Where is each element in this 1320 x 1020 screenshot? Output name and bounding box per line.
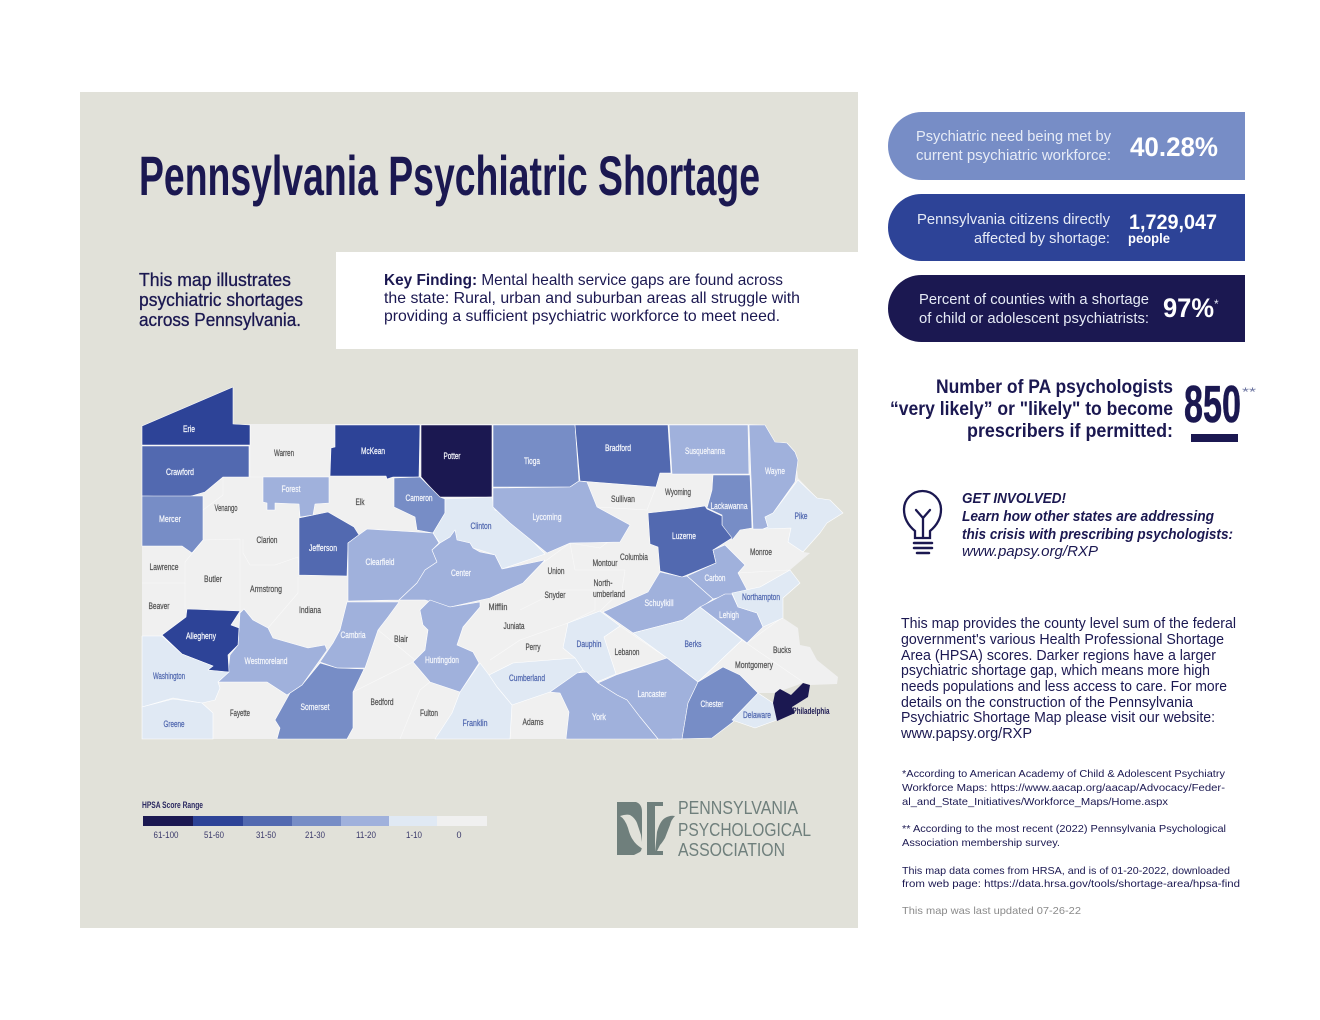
county: Cumberland	[489, 658, 583, 705]
map: county labels: Tioga	[524, 456, 540, 466]
footnotes: *According to American Academy of Child & Adolescent Psychiatry	[902, 768, 1226, 780]
map: county labels: Carbon	[704, 573, 726, 583]
text block: map description: Area (HPSA) scores. Darker regions have a larger	[901, 648, 1216, 664]
county base: zero score counties	[142, 424, 843, 739]
stat pill: citizens affected	[888, 194, 1245, 261]
callout: 850 psychologists: “very likely” or "likely" to become	[890, 399, 1173, 420]
stat pill: psychiatric need met: 40.28%	[1130, 132, 1218, 162]
county: Crawford	[142, 446, 249, 497]
county: Clearfield	[348, 529, 439, 601]
map: county labels: Wyoming	[665, 487, 691, 497]
map: county labels: Wayne	[765, 466, 785, 476]
county: Delaware	[732, 693, 777, 728]
text block: get involved: GET INVOLVED!	[962, 491, 1066, 507]
map: county labels: Greene	[164, 719, 184, 729]
map: county labels: Venango	[214, 503, 238, 513]
county: Center	[399, 530, 545, 607]
map: county labels: Erie	[183, 424, 195, 434]
title: Pennsylvania Psychiatric Shortage	[139, 144, 760, 207]
map: county labels: Butler	[204, 574, 222, 584]
map: county labels: Clearfield	[366, 557, 394, 567]
map: county labels: Snyder	[544, 590, 566, 600]
county: Potter	[421, 425, 492, 497]
footnotes: ** According to the most recent (2022) Pennsylvania Psychological	[902, 823, 1226, 835]
county: Lycoming	[493, 481, 630, 553]
county: Lancaster	[598, 658, 698, 739]
map: county labels: Pike	[794, 511, 808, 521]
text block: get involved: this crisis with prescribing psychologists:	[962, 527, 1233, 543]
county: Bradford	[575, 425, 671, 487]
county: Northampton	[732, 570, 800, 627]
map: county labels: Northampton	[742, 592, 780, 602]
stat pill: counties with shortage: of child or adolescent psychiatrists:	[919, 311, 1149, 327]
county: Susquehanna	[669, 425, 749, 474]
map: county labels: Adams	[522, 717, 544, 727]
map: county labels: Westmoreland	[244, 656, 288, 666]
map: county labels: Lancaster	[638, 689, 666, 699]
map: county labels: Bedford	[370, 697, 394, 707]
footnotes: This map data comes from HRSA, and is of 01-20-2022, downloaded	[902, 865, 1230, 877]
county: Berks	[633, 607, 742, 682]
county: Jefferson	[299, 512, 359, 576]
legend: HPSA score range: 0	[456, 830, 462, 840]
county: Philadelphia	[773, 683, 810, 721]
legend: HPSA score range: 31-50	[256, 830, 276, 840]
map: county labels: Lawrence	[150, 562, 178, 572]
map: county labels: Indiana	[299, 605, 321, 615]
text block: map description: www.papsy.org/RXP	[900, 726, 1032, 742]
text block: get involved: www.papsy.org/RXP	[962, 544, 1098, 560]
county: Luzerne	[648, 506, 732, 577]
footnotes: from web page: https://data.hrsa.gov/tools/shortage-area/hpsa-find	[902, 878, 1240, 890]
county: Forest	[263, 477, 329, 517]
stat pill: counties with shortage	[888, 275, 1245, 342]
map: county labels: Union	[548, 566, 564, 576]
map: county labels: Lebanon	[614, 647, 640, 657]
map: county labels: Delaware	[743, 710, 771, 720]
map: county labels: Bradford	[605, 443, 631, 453]
county: Westmoreland	[218, 609, 327, 695]
map: county labels: Franklin	[462, 718, 488, 728]
county: Dauphin	[563, 611, 620, 682]
stat pill: counties with shortage: *	[1214, 297, 1219, 311]
county: Huntingdon	[413, 600, 480, 692]
logo: Pennsylvania Psychological Association	[617, 798, 811, 860]
map: county labels: Fayette	[230, 708, 250, 718]
callout: 850 psychologists: 850	[1184, 376, 1241, 434]
map: county labels: Beaver	[148, 601, 170, 611]
map: county labels: Susquehanna	[685, 446, 725, 456]
county: Erie	[142, 387, 250, 445]
map: county labels	[148, 424, 830, 729]
panel: map background	[80, 92, 858, 928]
panel: key finding: Key Finding: Mental health service gaps are found across	[384, 272, 783, 289]
panel: key finding: the state: Rural, urban and suburban areas all struggle with	[384, 290, 800, 307]
map: county labels: Somerset	[300, 702, 330, 712]
stat pill: psychiatric need met: current psychiatric workforce:	[916, 148, 1111, 164]
text block: map description: This map provides the county level sum of the federal	[901, 616, 1236, 632]
icon: light bulb	[904, 491, 941, 553]
legend: HPSA score range: 21-30	[305, 830, 325, 840]
map: county labels: York	[592, 712, 606, 722]
map: county labels: Montgomery	[735, 660, 773, 670]
county: Cambria	[320, 602, 399, 668]
map: county labels: Washington	[153, 671, 185, 681]
map: county labels: Lackawanna	[710, 501, 748, 511]
callout: 850 psychologists	[890, 376, 1256, 442]
map: county labels: Crawford	[166, 467, 194, 477]
county: York	[550, 672, 658, 739]
map: county labels: Lycoming	[532, 512, 562, 522]
text block: map description	[900, 616, 1236, 742]
map: county labels: Philadelphia	[792, 706, 830, 716]
map: county labels: Berks	[684, 639, 702, 649]
stat pill: counties with shortage: Percent of counties with a shortage	[919, 292, 1149, 308]
county: Pike	[763, 480, 843, 552]
stat pill: citizens affected: people	[1128, 230, 1170, 246]
map: county labels: Clinton	[470, 521, 492, 531]
map: Pennsylvania counties	[142, 387, 843, 739]
text block: map description: details on the construction of the Pennsylvania	[901, 695, 1193, 711]
map: county labels: Mifflin	[488, 602, 508, 612]
map: county labels: Juniata	[504, 621, 524, 631]
callout: 850 psychologists: prescribers if permitted:	[967, 421, 1173, 442]
stat pill: counties with shortage: 97%	[1163, 293, 1214, 323]
map: county labels: Montour	[592, 558, 618, 568]
map: county labels: Monroe	[750, 547, 772, 557]
stat pill: psychiatric need met: Psychiatric need being met by	[916, 129, 1112, 145]
county: Franklin	[435, 663, 512, 739]
text block: get involved: Learn how other states are addressing	[962, 509, 1214, 525]
text block: map description: Psychiatric Shortage Map please visit our website:	[901, 710, 1215, 726]
footnotes	[902, 768, 1240, 917]
stat pill: psychiatric need met	[888, 112, 1245, 180]
map: county labels: Potter	[444, 451, 460, 461]
map: county labels: Armstrong	[250, 584, 282, 594]
footnotes: Association membership survey.	[902, 837, 1060, 849]
map: county labels: umberland	[593, 589, 625, 599]
map: county labels: Schuylkill	[644, 598, 674, 608]
county: Cameron	[394, 477, 445, 533]
map: county labels: Center	[451, 568, 471, 578]
callout: 850 psychologists: Number of PA psychologists	[936, 377, 1173, 398]
text block: map description: government's various Health Professional Shortage	[901, 632, 1224, 648]
county: Allegheny	[162, 609, 240, 673]
map: county labels: Luzerne	[672, 531, 696, 541]
text block: map intro: across Pennsylvania.	[139, 310, 301, 330]
map: county labels: Sullivan	[611, 494, 635, 504]
footnotes: Workforce Maps: https://www.aacap.org/aacap/Advocacy/Feder-	[902, 782, 1226, 794]
panel: key finding	[336, 252, 858, 349]
map: county labels: Cumberland	[509, 673, 545, 683]
map: county labels: Allegheny	[186, 631, 216, 641]
map: county labels: Cameron	[406, 493, 432, 503]
legend: HPSA score range: HPSA Score Range	[142, 800, 203, 810]
map: county labels: Chester	[700, 699, 724, 709]
legend: HPSA score range: 61-100	[154, 830, 178, 840]
county: Schuylkill	[603, 572, 713, 633]
map: county labels: Jefferson	[309, 543, 337, 553]
stat pill: citizens affected: Pennsylvania citizens directly	[917, 212, 1111, 228]
county: Carbon	[687, 545, 747, 599]
legend: HPSA score range: 11-20	[356, 830, 376, 840]
text block: map intro: This map illustrates	[139, 270, 291, 290]
legend: HPSA score range: 1-10	[406, 830, 422, 840]
text block: map intro	[139, 270, 303, 330]
map: county labels: Huntingdon	[425, 655, 459, 665]
county: Chester	[672, 667, 758, 739]
county: Greene	[142, 699, 213, 739]
stat pill: citizens affected: 1,729,047	[1129, 211, 1217, 234]
county: Tioga	[493, 425, 579, 487]
map: county labels: Bucks	[773, 645, 791, 655]
legend: HPSA score range	[142, 800, 487, 840]
map: county labels: North-	[594, 578, 612, 588]
county: Mercer	[142, 496, 203, 553]
text block: map description: needs populations and less access to care. For more	[901, 679, 1227, 695]
logo: Pennsylvania Psychological Association: PENNSYLVANIA	[678, 798, 798, 818]
map: county labels: Forest	[282, 484, 301, 494]
map: county labels: McKean	[361, 446, 385, 456]
text block: map intro: psychiatric shortages	[139, 290, 303, 310]
map: county labels: Mercer	[159, 514, 181, 524]
county: Lehigh	[700, 594, 763, 643]
map: county labels: Elk	[356, 497, 365, 507]
footnotes: This map was last updated 07-26-22	[902, 905, 1081, 917]
map: county labels: Lehigh	[719, 610, 739, 620]
map: county labels: Columbia	[620, 552, 648, 562]
county: Somerset	[275, 663, 364, 739]
map: county labels: Perry	[526, 642, 541, 652]
map: county labels: Cambria	[340, 630, 366, 640]
map: county labels: Dauphin	[576, 639, 602, 649]
map: county labels: Clarion	[256, 535, 278, 545]
county: Clinton	[433, 497, 545, 569]
county: Wayne	[749, 425, 798, 529]
logo: Pennsylvania Psychological Association: PSYCHOLOGICAL	[678, 820, 811, 840]
text block: get involved	[962, 491, 1233, 560]
stat pill: citizens affected: affected by shortage:	[974, 231, 1110, 247]
county: McKean	[330, 425, 420, 479]
logo: Pennsylvania Psychological Association: ASSOCIATION	[678, 840, 785, 860]
map: county labels: Blair	[394, 634, 408, 644]
map: county labels: Fulton	[420, 708, 438, 718]
text block: map description: psychiatric shortage gap, which means more high	[901, 663, 1210, 679]
legend: HPSA score range: 51-60	[204, 830, 224, 840]
callout: 850 psychologists: **	[1242, 385, 1256, 399]
panel: key finding: providing a sufficient psychiatric workforce to meet need.	[384, 308, 780, 325]
footnotes: al_and_State_Initiatives/Workforce_Maps/Home.aspx	[902, 796, 1169, 808]
county: Lackawanna	[707, 475, 752, 540]
map: county labels: Warren	[274, 448, 294, 458]
county: Washington	[142, 636, 229, 707]
